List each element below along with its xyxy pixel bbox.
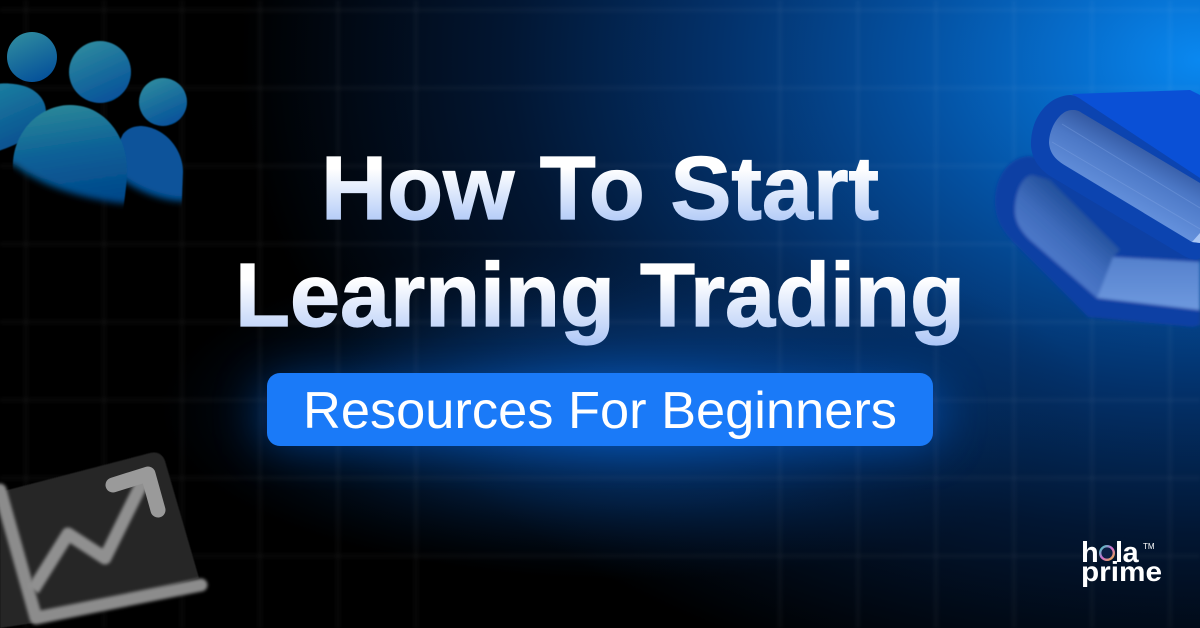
icon: stacked books [995,90,1200,327]
person: back left [0,32,57,156]
logo word: hola: h [1081,537,1099,569]
trademark: TM [1143,542,1155,551]
logo ring [1100,546,1114,560]
person: back right [120,77,188,206]
logo letters: la: la [1115,537,1140,569]
subtitle text: Resources For Beginners [303,382,897,440]
chart panel [0,452,199,628]
chart arrow head [113,474,158,510]
chart trend line [33,475,146,590]
title: first line: How To Start [321,139,879,239]
logo word: prime: prime [1081,556,1162,587]
pill glow [262,385,938,443]
logo: hola prime [1081,537,1162,587]
subtitle pill [267,373,933,446]
title: second line: Learning Trading [235,246,965,346]
icon: growth chart [0,452,201,628]
icon: group of people [0,32,188,208]
book: upper [1031,90,1200,259]
person: centre [12,40,132,208]
chart axis [0,490,201,618]
book: lower [995,156,1200,327]
